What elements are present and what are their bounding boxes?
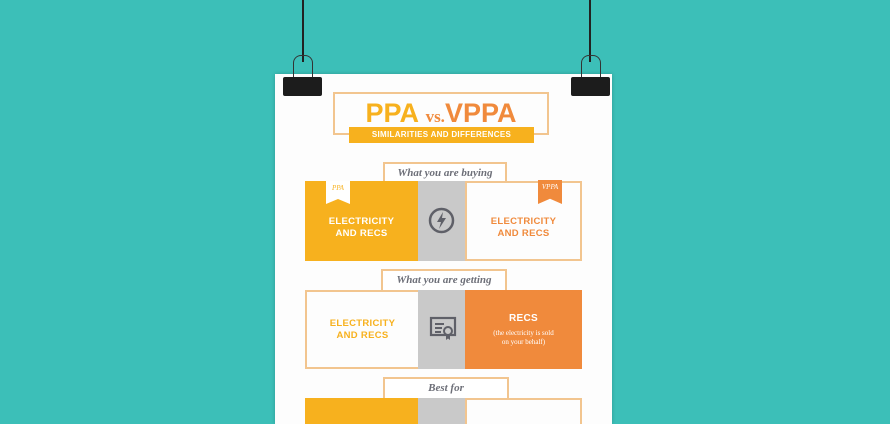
row 1: AND RECS [335,228,388,239]
ribbon PPA [326,181,350,204]
label: what you are getting: What you are getting [396,274,492,286]
row 2: on your behalf) [502,338,545,346]
subtitle banner [349,127,534,143]
label: what you are getting [381,269,507,291]
poster sheet [275,74,612,424]
row 2: AND RECS [336,330,388,340]
subtitle banner: SIMILARITIES AND DIFFERENCES [372,130,511,139]
label: best for: Best for [428,382,464,394]
label: best for [383,377,509,400]
row 1: ELECTRICITY [329,216,394,227]
title box [333,92,549,135]
ribbon PPA: PPA [332,184,344,192]
row 1: AND RECS [497,228,550,239]
hanging strings [302,0,591,62]
label: what you are buying: What you are buying [397,167,493,179]
row 1 [305,180,582,261]
row 2: (the electricity is sold [493,328,554,336]
row 1: ELECTRICITY [491,216,556,227]
icon: certificate [430,316,456,340]
icon: lightning [428,208,454,234]
row 2: ELECTRICITY [330,318,395,328]
row 3 [305,398,582,424]
binder clip right [571,55,610,96]
binder clip left [283,55,322,96]
label: what you are buying [383,162,507,183]
ribbon VPPA: VPPA [542,183,558,191]
ribbon VPPA [538,180,562,204]
row 2 [305,290,582,369]
title box: PPA vs.VPPA [366,98,516,128]
row 2: RECS [509,312,538,324]
